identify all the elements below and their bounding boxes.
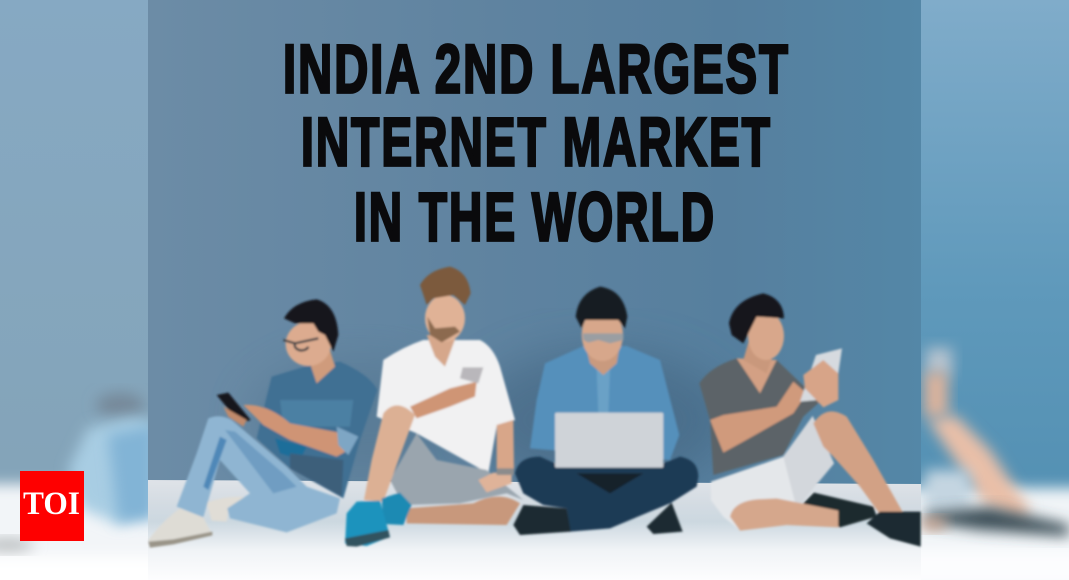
hair (576, 287, 627, 328)
jeans (515, 457, 698, 532)
hair (420, 267, 471, 305)
front shoe (148, 508, 212, 547)
title: IN THE WORLD (354, 178, 716, 256)
dark inner gap between legs (577, 473, 643, 493)
phone (217, 393, 251, 423)
neck and face (427, 335, 457, 367)
grey shorts (390, 433, 523, 505)
denim shirt (530, 346, 679, 460)
white shorts (711, 416, 834, 531)
jeans (177, 416, 340, 532)
hair (284, 299, 338, 352)
title (283, 30, 790, 256)
shoes (513, 505, 571, 535)
phone (460, 367, 483, 383)
arm holding phone (410, 382, 477, 418)
TOI logo: TOI (23, 486, 80, 522)
left blurred side panel (0, 0, 148, 556)
figure: man with laptop (513, 287, 698, 535)
TOI logo (20, 471, 84, 541)
glasses (283, 338, 318, 350)
glasses (583, 333, 623, 343)
legs (730, 498, 838, 531)
neck and face (585, 343, 620, 375)
neck and face (310, 350, 335, 383)
laptop (555, 413, 663, 468)
far leg (407, 497, 520, 525)
blue shoes (382, 493, 412, 525)
back shoe (803, 493, 877, 527)
figure: man with smartphone in denim shirt (148, 299, 377, 548)
back shoe (207, 497, 247, 522)
hand (803, 360, 838, 407)
figure: man with tablet (699, 293, 921, 547)
tablet (800, 348, 842, 402)
white shirt (377, 340, 515, 473)
forearm (243, 405, 348, 457)
near leg (364, 405, 415, 502)
neck and face (743, 337, 773, 373)
figure: man with smartphone in white shirt (345, 267, 523, 547)
front shoe (867, 512, 921, 547)
photo background: wall and floor (148, 0, 921, 580)
right blurred side panel (921, 0, 1069, 548)
grey polo (699, 358, 820, 475)
forearm (710, 382, 807, 453)
denim shirt (257, 362, 377, 498)
hair (729, 293, 784, 343)
title: INDIA 2ND LARGEST (283, 30, 790, 108)
title: INTERNET MARKET (301, 104, 772, 180)
